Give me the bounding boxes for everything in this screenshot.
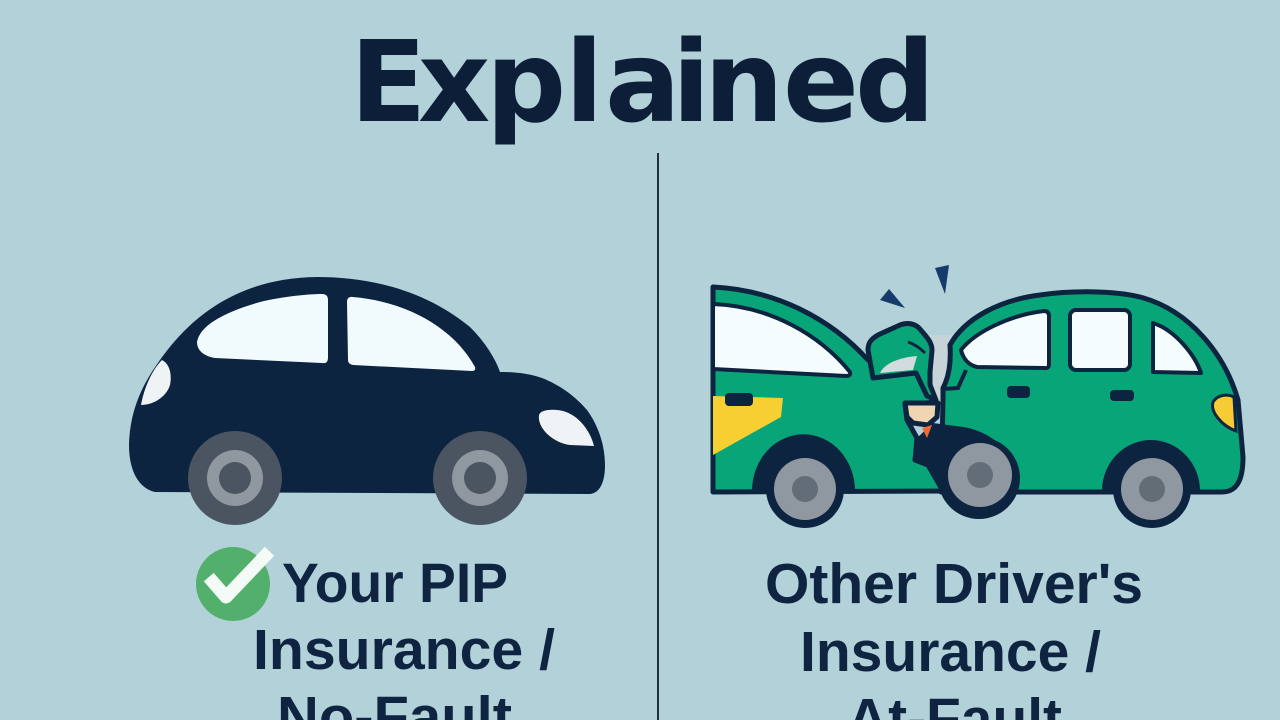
crumpled bumper xyxy=(915,423,1015,491)
right car body xyxy=(941,292,1243,492)
label: your PIP insurance: Your PIP xyxy=(282,551,508,614)
left car body xyxy=(713,287,943,492)
impact mark right xyxy=(935,265,949,294)
gap between the cars xyxy=(928,335,952,403)
illustration: two green cars colliding, at-fault side xyxy=(713,265,1243,528)
title: Explained xyxy=(350,18,935,148)
left wheel xyxy=(766,450,844,528)
label: your PIP insurance xyxy=(253,551,555,720)
impact mark left xyxy=(880,289,905,308)
label: other driver's insurance xyxy=(765,552,1143,720)
label: your PIP insurance: Insurance / xyxy=(253,618,555,682)
crumpled hood xyxy=(868,324,936,400)
middle wheel xyxy=(938,437,1020,519)
illustration: navy car, no-fault side xyxy=(129,277,605,525)
label: other driver's insurance: Insurance / xyxy=(800,620,1101,684)
icon: green check mark xyxy=(196,547,270,621)
label: other driver's insurance: Other Driver's xyxy=(765,552,1143,616)
wheel arches xyxy=(752,434,855,491)
right wheel xyxy=(1113,450,1191,528)
